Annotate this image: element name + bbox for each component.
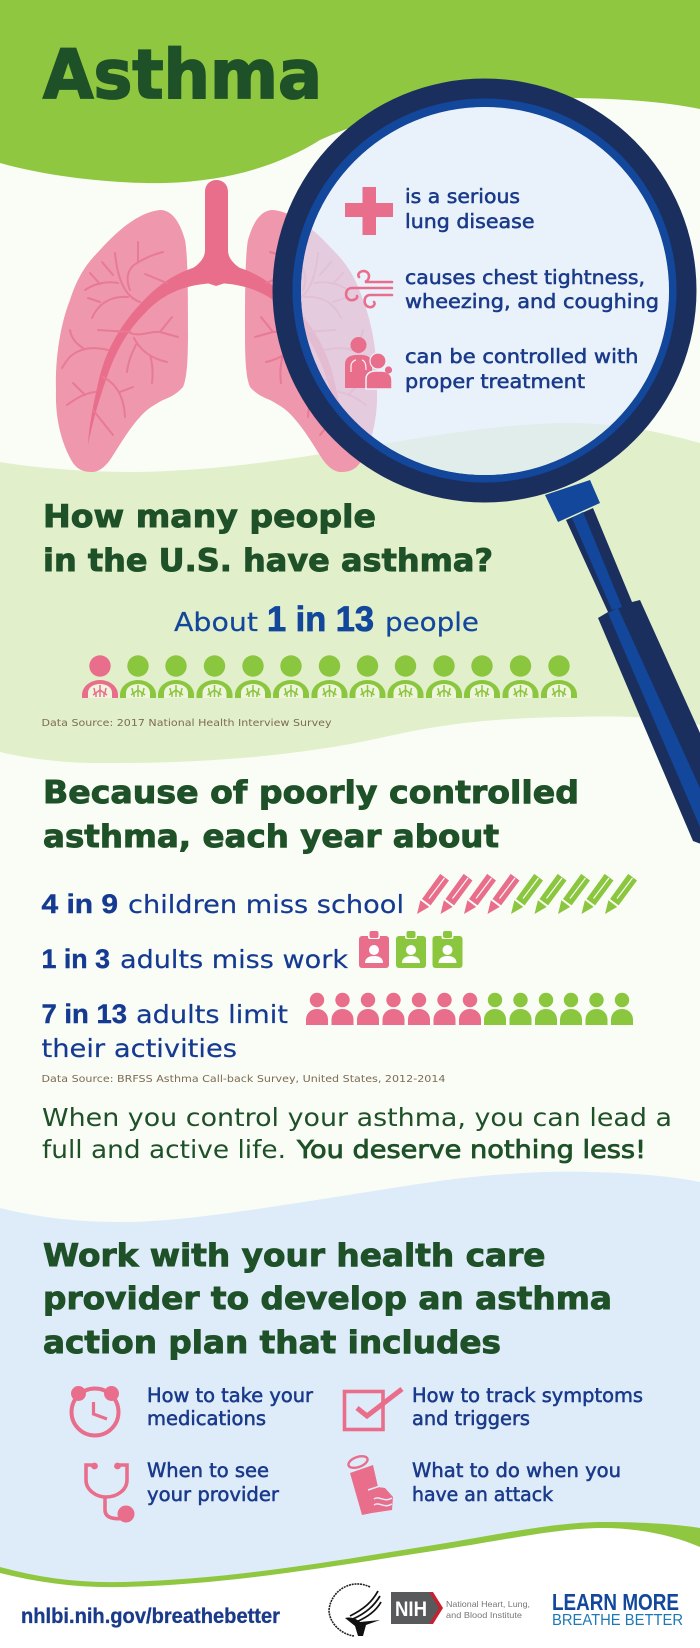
logo: Learn More Breathe Better: BREATHE BETTER	[552, 1612, 683, 1629]
logo: HHS	[329, 1584, 381, 1636]
text: when to see provider	[147, 1459, 280, 1506]
icon: alarm clock	[71, 1386, 119, 1436]
statistic: 1 in 3 adults: adults miss work	[120, 945, 349, 974]
heading: how many people: How many people	[43, 499, 376, 535]
icon: inhaler	[347, 1454, 393, 1515]
data source: NHIS: Data Source: 2017 National Health Interview Survey	[42, 718, 332, 729]
heading: how many people: in the U.S. have asthma?	[43, 543, 493, 579]
text: attack: have an attack	[412, 1483, 554, 1506]
text: symptoms and triggers: and triggers	[412, 1407, 530, 1430]
statistic: about 1 in 13 people: About	[174, 608, 258, 638]
pictogram: adults	[306, 993, 633, 1025]
text: attack	[412, 1459, 621, 1506]
statistic: about 1 in 13 people: people	[385, 608, 479, 638]
text: causes symptoms	[405, 266, 659, 313]
text block: control your asthma	[42, 1103, 672, 1164]
icon: checkbox	[344, 1389, 402, 1430]
footer white area with green wave	[0, 1522, 700, 1648]
heading: work with provider: action plan that includes	[43, 1325, 501, 1361]
footer url: nhlbi.nih.gov/breathebetter	[21, 1605, 280, 1628]
text: serious lung disease: is a serious	[405, 185, 520, 208]
logo: NIH: and Blood Institute	[446, 1610, 522, 1620]
icon: stethoscope	[86, 1463, 134, 1522]
heading: poorly controlled asthma: Because of poorly controlled	[43, 775, 579, 811]
logo: NIH: National Heart, Lung,	[446, 1599, 530, 1609]
heading: poorly controlled asthma	[43, 775, 579, 855]
statistic: 7 in 13 adults: 7 in 13	[42, 999, 127, 1029]
statistic: 7 in 13 adults	[42, 999, 288, 1063]
statistic: about 1 in 13 people	[174, 600, 479, 639]
logo: NIH	[391, 1592, 530, 1624]
pictogram: 1 of 13 people	[82, 655, 577, 698]
text: when to see provider: When to see	[147, 1459, 269, 1482]
heading: work with provider	[43, 1238, 612, 1361]
text block: control your asthma: You deserve nothing less!	[296, 1135, 646, 1164]
text: serious lung disease	[405, 185, 534, 233]
text: serious lung disease: lung disease	[405, 210, 534, 233]
icon: medical cross	[345, 187, 393, 235]
heading: work with provider: Work with your health care	[43, 1238, 546, 1274]
text: attack: What to do when you	[412, 1459, 621, 1482]
statistic: about 1 in 13 people: 1 in 13	[267, 600, 374, 639]
text block: control your asthma: full and active life.	[42, 1135, 286, 1164]
statistic: 7 in 13 adults: adults limit	[136, 1000, 288, 1029]
statistic: 7 in 13 adults: their activities	[42, 1034, 237, 1063]
text: symptoms and triggers: How to track symptoms	[412, 1384, 643, 1407]
text: causes symptoms: causes chest tightness,	[405, 266, 645, 289]
panel: blue action plan band	[0, 1172, 700, 1600]
panel: green header band	[0, 0, 700, 183]
text: medications: How to take your	[147, 1384, 314, 1407]
text: controlled with treatment: can be controlled with	[405, 345, 638, 368]
magnifying glass handle	[545, 480, 700, 866]
pictogram: pencils	[417, 874, 637, 914]
statistic: 4 in 9 children: 4 in 9	[42, 889, 118, 919]
heading: poorly controlled asthma: asthma, each year about	[43, 819, 499, 855]
heading: work with provider: provider to develop an asthma	[43, 1281, 612, 1317]
text: medications	[147, 1384, 314, 1430]
illustration: lungs	[56, 180, 377, 472]
statistic: 4 in 9 children	[42, 889, 404, 919]
statistic: 4 in 9 children: children miss school	[128, 890, 404, 919]
data source: BRFSS: Data Source: BRFSS Asthma Call-back Survey, United States, 2012-2014	[42, 1074, 446, 1085]
statistic: 1 in 3 adults: 1 in 3	[42, 944, 110, 974]
text block: control your asthma: When you control your asthma, you can lead a	[42, 1103, 672, 1132]
text: symptoms and triggers	[412, 1384, 643, 1430]
pictogram: work badges	[359, 930, 462, 968]
title: Asthma	[43, 36, 322, 115]
text: controlled with treatment: proper treatment	[405, 370, 585, 393]
heading: how many people	[43, 499, 493, 579]
text: medications: medications	[147, 1407, 266, 1430]
text: when to see provider: your provider	[147, 1483, 280, 1506]
icon: wind	[346, 271, 392, 307]
logo: NIH: NIH	[395, 1598, 427, 1621]
logo: Learn More Breathe Better	[552, 1589, 683, 1629]
magnifying glass lens	[272, 78, 696, 502]
text: controlled with treatment	[405, 345, 638, 393]
text: causes symptoms: wheezing, and coughing	[405, 290, 659, 313]
panel: light green band	[0, 423, 700, 763]
icon: doctor and family	[345, 337, 392, 389]
statistic: 1 in 3 adults	[42, 944, 349, 974]
